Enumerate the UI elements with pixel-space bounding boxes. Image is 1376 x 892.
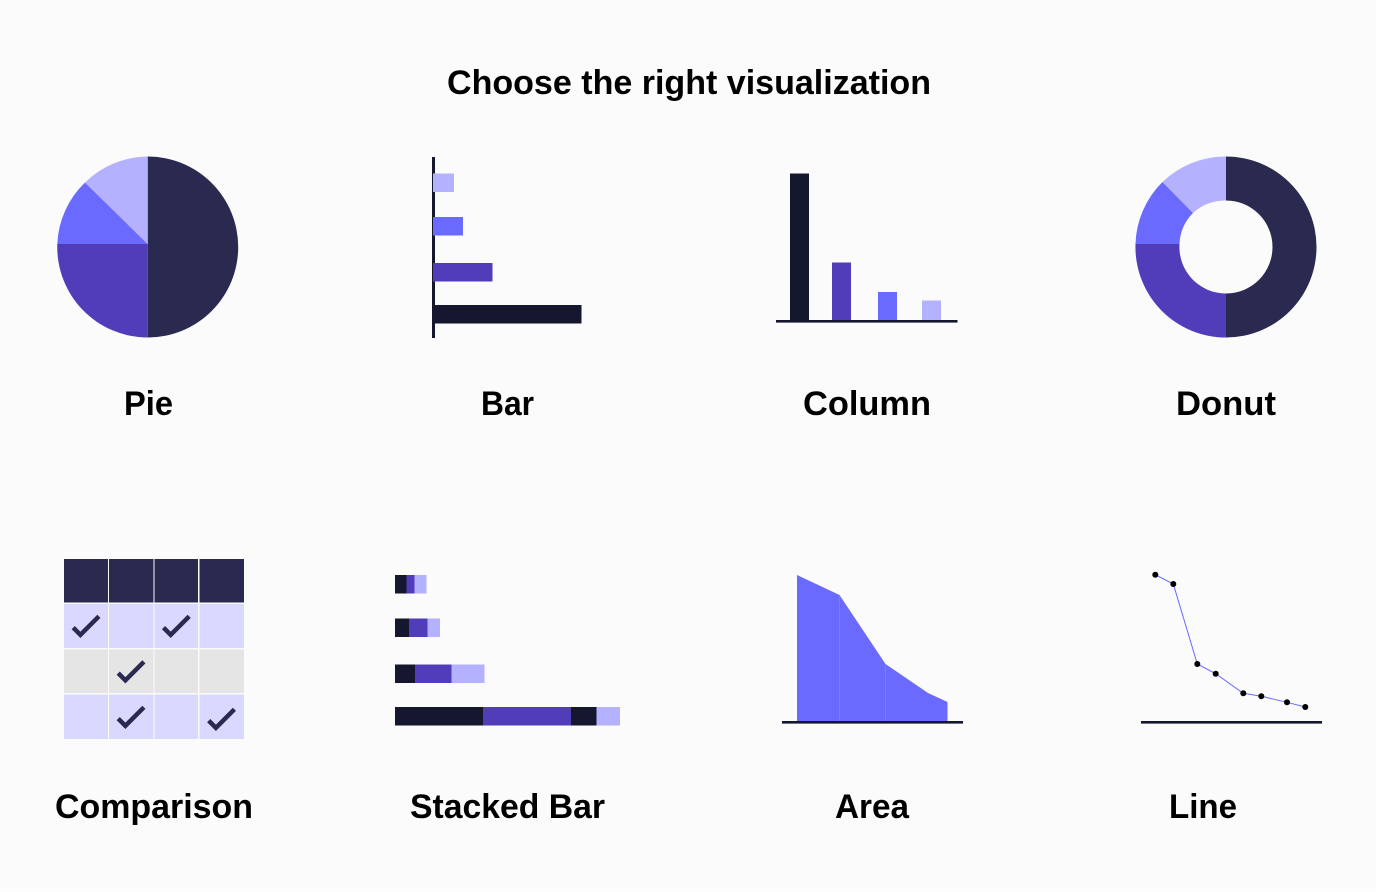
header row xyxy=(64,559,244,602)
row 1 xyxy=(64,604,244,648)
label: Donut: Donut xyxy=(1176,385,1276,423)
bar chart xyxy=(432,157,582,338)
row 3 xyxy=(64,694,244,739)
label: Area: Area xyxy=(835,788,910,826)
check marks xyxy=(73,616,234,728)
label: Pie: Pie xyxy=(124,385,173,423)
column chart xyxy=(776,174,958,323)
label: Bar: Bar xyxy=(481,385,534,423)
comparison table xyxy=(64,559,244,739)
line chart xyxy=(1141,572,1322,724)
row 2 xyxy=(64,650,244,693)
donut chart xyxy=(1135,156,1316,338)
label: Stacked Bar: Stacked Bar xyxy=(410,788,605,826)
area chart xyxy=(782,575,963,724)
stacked bar chart xyxy=(395,575,620,726)
pie chart xyxy=(57,156,238,338)
label: Line: Line xyxy=(1169,788,1237,826)
label: Comparison: Comparison xyxy=(55,788,253,826)
label: Column: Column xyxy=(803,385,931,423)
title: Choose the right visualization xyxy=(447,64,931,102)
